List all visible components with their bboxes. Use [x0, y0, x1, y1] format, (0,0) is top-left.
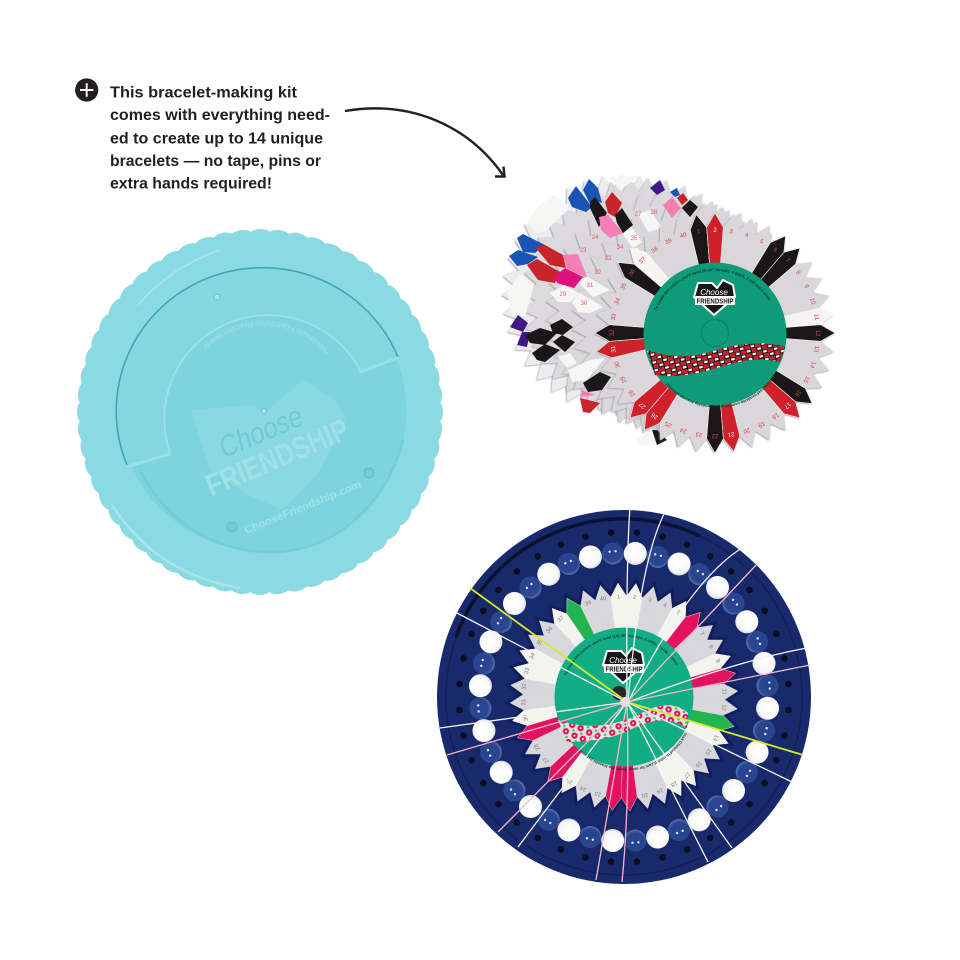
white threads: [440, 507, 807, 862]
loom card base: [504, 577, 744, 817]
embossed arc text: [177, 321, 330, 417]
rear cards numbers: [560, 210, 658, 319]
loom card numbers: 8: [707, 644, 714, 650]
main card numbers: 33: [611, 313, 618, 321]
loom card numbers: 25: [565, 776, 574, 785]
loom card numbers: 28: [533, 743, 542, 751]
main card curved instructions: [656, 271, 774, 312]
rear cards numbers: 32: [595, 270, 602, 276]
embossed logo text: ChooseFriendship.com: [243, 479, 363, 537]
arch end tabs: [127, 358, 398, 467]
arch band: [116, 268, 398, 465]
loom logo: FRIENDSHIP: [606, 665, 642, 674]
main card numbers: 8: [794, 270, 801, 277]
loom card numbers: 32: [521, 683, 528, 690]
loom card numbers: 40: [600, 596, 607, 603]
main card numbers: 28: [628, 388, 637, 397]
main card numbers: 39: [664, 238, 674, 246]
rear cards numbers: 37: [637, 256, 644, 262]
rear cards numbers: 34: [617, 245, 624, 251]
text block: kit description: [110, 84, 330, 193]
arch inner groove: [164, 315, 360, 453]
loom card numbers: 17: [682, 770, 691, 779]
loom card numbers: 20: [641, 791, 648, 798]
teal loom lid: [77, 229, 443, 595]
loom disk: [437, 510, 811, 884]
main card numbers: 24: [679, 426, 688, 434]
lid scalloped body: [84, 236, 436, 588]
main card numbers: 36: [628, 268, 637, 278]
main card numbers: 19: [756, 420, 766, 428]
main card numbers: 29: [620, 374, 628, 384]
rear cards numbers: 30: [581, 301, 588, 307]
main card numbers: 10: [808, 297, 816, 306]
lid lower ring shading: [140, 440, 403, 552]
loom card numbers: 30: [523, 714, 530, 721]
loom card numbers: 16: [694, 759, 703, 768]
teal loom lid: Handmade Friendship Bracelet Maker: [204, 320, 330, 355]
main card numbers: 5: [758, 239, 765, 246]
loom card numbers: 33: [524, 667, 531, 675]
main card curved footer: [660, 372, 775, 406]
main card numbers: 26: [650, 411, 660, 420]
loom card numbers: 19: [656, 786, 664, 794]
main card logo: FRIENDSHIP: [696, 297, 734, 306]
text block: kit description: ed to create up to 14 unique: [110, 130, 323, 147]
loom card numbers: 34: [529, 652, 537, 661]
main card numbers: 27: [638, 400, 647, 410]
embossed logo text: FRIENDSHIP: [200, 412, 354, 503]
loom card numbers: 27: [542, 755, 551, 764]
rear cards white threads: [507, 176, 668, 446]
main card numbers: [610, 228, 820, 438]
loom card numbers: 23: [594, 790, 602, 797]
loom card numbers: 11: [721, 689, 727, 695]
main card numbers: 21: [727, 430, 735, 437]
loom peg holes: [456, 529, 792, 865]
loom card numbers: 36: [545, 626, 554, 635]
loom card numbers: 1: [617, 594, 621, 600]
embossed logo text: Choose: [214, 400, 308, 465]
loom card numbers: 24: [579, 784, 588, 792]
main card numbers: 35: [620, 282, 629, 291]
rear cards numbers: 23: [580, 248, 587, 254]
loom card numbers: 2: [633, 595, 636, 601]
rear cards colored threads: [509, 179, 698, 445]
rear cards numbers: 33: [605, 256, 612, 262]
loom card numbers: 14: [711, 733, 719, 742]
main card numbers: 17: [782, 401, 792, 410]
lid edge highlights: [112, 250, 240, 588]
main card numbers: 40: [679, 232, 688, 240]
pattern card stack: Visit ChooseFriendship.com for more friendship bracelet patterns!: [666, 375, 776, 408]
loom card numbers: 39: [584, 600, 592, 608]
main card numbers: 3: [729, 229, 734, 236]
loom card numbers: 4: [662, 602, 667, 609]
rear cards numbers: 24: [592, 235, 599, 241]
loom card numbers: 35: [536, 638, 545, 647]
main card numbers: 20: [742, 426, 751, 434]
loom card numbers: 31: [521, 699, 527, 706]
main card numbers: 7: [784, 258, 791, 265]
main card logo: [694, 280, 735, 315]
loom card numbers: 37: [557, 615, 566, 624]
pattern card stack: To create this pattern you'll need (8) 48" threads: 4 black, 2 red and 2 white: [654, 268, 770, 310]
loom curved footer: [570, 730, 686, 768]
main card numbers: 14: [808, 360, 816, 369]
main card numbers: 30: [614, 360, 622, 369]
loom card numbers: 5: [675, 610, 681, 617]
main card numbers: 6: [772, 247, 779, 254]
loom rim: [446, 519, 802, 875]
text block: kit description: extra hands required!: [110, 176, 272, 193]
main card numbers: 32: [610, 329, 616, 336]
neon yellow thread: [470, 588, 803, 755]
main card numbers: 11: [812, 313, 819, 321]
main card base: [595, 213, 835, 453]
thread knot: [620, 697, 630, 707]
rear cards: [502, 172, 824, 455]
rear cards numbers: 31: [587, 283, 594, 289]
arrow: from text to pattern cards: [345, 108, 504, 176]
main card numbers: 4: [744, 233, 750, 240]
main card numbers: 2: [713, 228, 717, 234]
loom card numbers: 15: [703, 747, 712, 756]
loom card numbers: [521, 594, 727, 798]
pattern card stack: [500, 175, 835, 454]
main card numbers: 31: [611, 345, 618, 353]
main card numbers: 9: [802, 284, 810, 290]
loom card numbers: 3: [648, 597, 652, 604]
loom card numbers: 7: [698, 631, 705, 637]
rear cards numbers: 35: [617, 281, 624, 287]
icon: plus in circle: [75, 78, 98, 102]
lid recessed well: [119, 268, 407, 552]
main card green center: [644, 262, 786, 406]
rear cards numbers: 38: [650, 245, 657, 251]
main card numbers: 15: [801, 375, 810, 384]
rear cards numbers: 28: [651, 210, 658, 216]
pink threads: [447, 563, 810, 882]
loom card numbers: 12: [720, 704, 727, 711]
center hole: [612, 686, 626, 700]
main card numbers: 1: [697, 229, 702, 235]
embossed logo text: [200, 400, 363, 537]
lid pegs: [214, 294, 374, 532]
loom card numbers: 9: [714, 659, 721, 664]
loom card wedges: [511, 583, 737, 811]
main card numbers: 25: [664, 419, 673, 428]
main card numbers: 37: [638, 256, 648, 265]
main card numbers: 16: [793, 388, 802, 398]
main card center indent: [702, 320, 728, 346]
loom rim shadow: [456, 519, 700, 637]
main card numbers: 12: [814, 330, 820, 337]
embossed heart: [191, 380, 347, 510]
loom curved instructions: [566, 637, 682, 677]
main card numbers: 18: [770, 411, 779, 420]
main pattern card: [595, 213, 835, 453]
main card numbers: 34: [614, 297, 622, 306]
main card numbers: 13: [812, 345, 819, 353]
rear cards numbers: 35: [631, 236, 638, 242]
rear cards numbers: 34: [610, 298, 617, 304]
loom card recess: [499, 572, 749, 822]
navy loom with threads: [437, 507, 811, 884]
navy loom with threads: Visit ChooseFriendship.com for more friendship bracelet patterns!: [580, 733, 687, 772]
arch upper groove: [116, 268, 398, 465]
loom pattern card: [504, 577, 744, 817]
main card wedges: [595, 213, 835, 453]
loom green center: [554, 628, 694, 766]
rear cards numbers: 29: [560, 292, 567, 298]
text block: kit description: bracelets — no tape, pins or: [110, 153, 321, 170]
main card numbers: 38: [651, 246, 660, 255]
rear cards numbers: 27: [635, 212, 642, 218]
text block: kit description: comes with everything need-: [110, 107, 330, 124]
navy loom with threads: To create this pattern you'll need (10) 48" threads: 6 white, 2 pink, 2 neon: [564, 634, 678, 675]
loom logo: Choose: [609, 656, 637, 665]
loom card numbers: 18: [670, 779, 678, 788]
main card logo: Choose: [700, 288, 728, 297]
text block: kit description: This bracelet-making kit: [110, 84, 298, 101]
main card numbers: 22: [711, 432, 718, 438]
loom logo: [603, 648, 644, 683]
rear cards numbers: 33: [607, 313, 614, 319]
loom beads: [468, 541, 780, 853]
main card ribbon sample: [647, 343, 785, 376]
loom ribbon sample: [558, 705, 688, 742]
main card numbers: 23: [695, 430, 703, 437]
